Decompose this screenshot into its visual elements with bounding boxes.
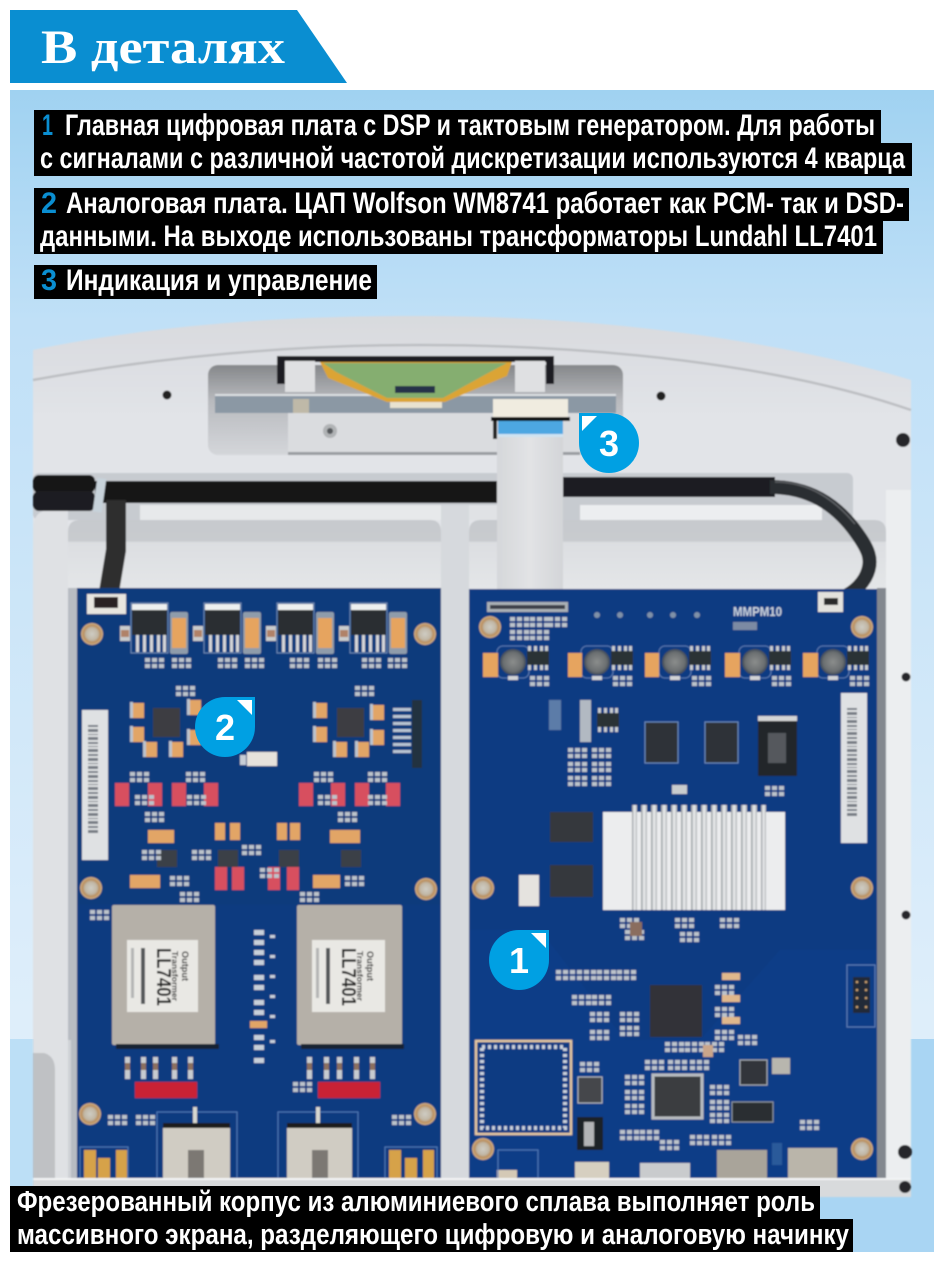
marker 1: 1 <box>509 940 529 981</box>
legend item 3: 3 <box>41 264 57 297</box>
PCB: digital board: MMPM10 <box>733 604 782 619</box>
marker 2: 2 <box>215 707 235 748</box>
caption <box>10 1186 853 1252</box>
legend item 2 <box>34 187 909 254</box>
flat ribbon cable <box>497 421 563 599</box>
marker 2 <box>195 697 255 757</box>
PCB: digital board <box>469 589 877 1180</box>
power cables <box>33 475 870 604</box>
case body <box>33 316 911 1197</box>
device photo: opened aluminium case with circuit boards <box>33 316 912 1197</box>
bottom of case <box>33 1178 911 1197</box>
marker 1 <box>489 930 549 990</box>
legend item 1 <box>34 109 912 176</box>
legend item 2: 2 <box>41 187 57 220</box>
pin header <box>847 965 875 1027</box>
cable channel <box>33 473 853 520</box>
transformer left <box>112 905 219 1049</box>
transformer left: LL7401 <box>152 948 174 1006</box>
transformer right: Output <box>365 951 375 981</box>
heatsink <box>603 805 785 910</box>
legend item 1: 1 <box>42 109 53 142</box>
title banner <box>10 10 347 83</box>
marker 3: 3 <box>599 423 619 464</box>
PCB: analog board <box>77 588 441 1180</box>
left wall and dividers <box>33 510 68 1180</box>
transformer right <box>297 905 404 1049</box>
legend item 3: Индикация и управление <box>66 264 372 297</box>
display recess <box>208 356 623 455</box>
transformer right: Transformer <box>355 951 364 1001</box>
gold square frame <box>476 1041 571 1134</box>
cavities <box>68 520 441 590</box>
transformer left: Output <box>180 951 190 981</box>
marker 3 <box>579 413 639 473</box>
transformer right: LL7401 <box>337 948 359 1006</box>
title banner: В деталях <box>41 21 285 74</box>
transformer left: Transformer <box>170 951 179 1001</box>
